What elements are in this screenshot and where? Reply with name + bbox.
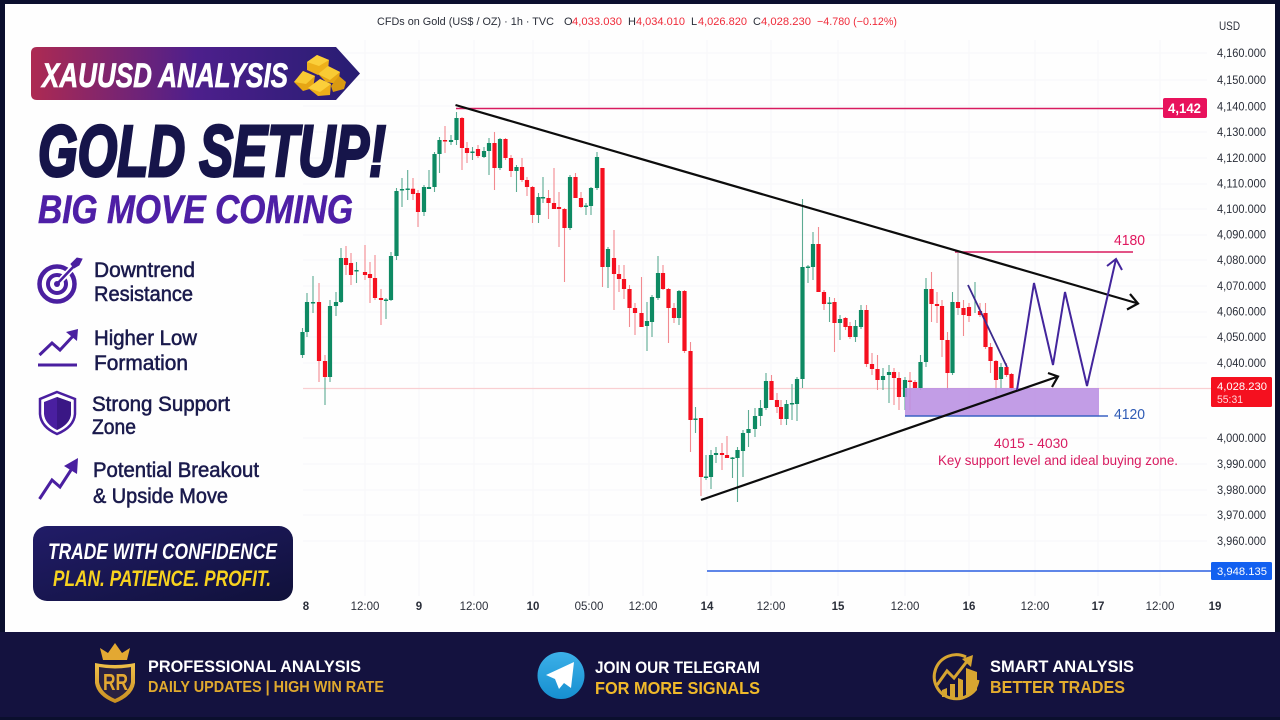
badge: XAUUSD ANALYSIS	[31, 47, 360, 100]
short falling trendline	[968, 285, 1007, 367]
level line: 4120	[905, 415, 1108, 417]
chart header: symbol and OHLC values: −4.780 (−0.12%)	[817, 16, 897, 28]
icon: breakout arrow	[40, 458, 78, 499]
title: GOLD SETUP!: GOLD SETUP!	[38, 112, 386, 192]
time axis: 12:00	[1021, 601, 1049, 613]
green candle wicks	[302, 112, 1001, 502]
chart header: symbol and OHLC values: L	[691, 16, 697, 28]
icon: shield	[40, 392, 75, 434]
icon: gold bars	[294, 55, 346, 96]
level line: 3,948.135	[707, 570, 1211, 572]
price axis: 4,040.000	[1217, 358, 1266, 370]
footer: professional analysis: PROFESSIONAL ANALYSIS	[148, 657, 361, 676]
time axis: 10	[527, 601, 539, 613]
footer: smart analysis: SMART ANALYSIS	[990, 657, 1134, 676]
time axis: 12:00	[460, 601, 488, 613]
level line: 4180 target	[955, 251, 1133, 253]
footer: telegram: JOIN OUR TELEGRAM	[595, 658, 760, 677]
price axis: 4,000.000	[1217, 433, 1266, 445]
label: 4180: 4180	[1114, 232, 1145, 249]
price axis: 3,990.000	[1217, 459, 1266, 471]
chart header: symbol and OHLC values: O	[564, 16, 573, 28]
list item: downtrend resistance: Resistance	[94, 282, 193, 306]
price axis: 3,960.000	[1217, 536, 1266, 548]
footer bar	[0, 632, 1280, 717]
price axis: 4,150.000	[1217, 75, 1266, 87]
list item: higher low formation	[38, 326, 197, 375]
price axis: 4,130.000	[1217, 127, 1266, 139]
red candle bodies	[319, 118, 1012, 477]
time axis: 15	[832, 601, 845, 613]
price axis: 4,110.000	[1217, 178, 1266, 190]
list item: potential breakout	[40, 458, 259, 508]
callout: trade with confidence: TRADE WITH CONFIDENCE	[48, 539, 278, 564]
footer: telegram	[538, 652, 760, 699]
chart header: symbol and OHLC values: 4,034.010	[636, 16, 685, 28]
price axis: 3,980.000	[1217, 485, 1266, 497]
time axis: 12:00	[1146, 601, 1174, 613]
price axis	[1217, 21, 1266, 548]
footer: telegram: FOR MORE SIGNALS	[595, 678, 760, 698]
grey tall wick at the 4180 high	[957, 253, 959, 315]
footer: smart analysis: BETTER TRADES	[990, 677, 1125, 697]
time axis	[303, 601, 1221, 613]
time axis: 9	[416, 601, 422, 613]
chart header: symbol and OHLC values: CFDs on Gold (US$ / OZ) · 1h · TVC	[377, 16, 554, 28]
candlesticks	[302, 112, 1012, 502]
green candle bodies	[302, 118, 1001, 478]
icon: trend line	[38, 329, 78, 365]
chart header: symbol and OHLC values: 4,028.230	[761, 16, 811, 28]
badge: XAUUSD ANALYSIS: XAUUSD ANALYSIS	[40, 57, 288, 95]
icon: gold chart circle	[934, 655, 978, 699]
time axis: 12:00	[629, 601, 657, 613]
price axis: 4,050.000	[1217, 332, 1266, 344]
price tag: 4,142	[1163, 98, 1207, 118]
price tag: current price and countdown: 55:31	[1217, 394, 1243, 406]
time axis: 16	[963, 601, 975, 613]
price tag: 4,142: 4,142	[1168, 100, 1201, 116]
icon: telegram	[538, 652, 584, 699]
icon: target	[40, 258, 82, 302]
time axis: 19	[1209, 601, 1221, 613]
list item: strong support zone	[40, 392, 230, 439]
chart header: symbol and OHLC values: H	[628, 16, 636, 28]
list item: potential breakout: Potential Breakout	[93, 458, 259, 482]
time axis: 05:00	[575, 601, 603, 613]
price axis: 4,140.000	[1217, 102, 1266, 114]
price tag: current price and countdown	[1211, 377, 1272, 407]
footer: smart analysis	[934, 655, 1134, 699]
price tag: 3,948.135	[1211, 562, 1272, 580]
support zone rectangle	[905, 388, 1099, 416]
level line: 4142 resistance	[456, 108, 1163, 110]
price axis: 4,070.000	[1217, 281, 1266, 293]
list item: potential breakout: & Upside Move	[93, 484, 228, 508]
price axis: 4,160.000	[1217, 48, 1266, 60]
time axis: 12:00	[757, 601, 785, 613]
label: 4120: 4120	[1114, 406, 1145, 423]
annotation: key support level: Key support level and ideal buying zone.	[938, 453, 1178, 468]
list item: higher low formation: Higher Low	[94, 326, 197, 350]
chart header: symbol and OHLC values: 4,033.030	[572, 16, 622, 28]
price axis: 4,100.000	[1217, 204, 1266, 216]
list item: higher low formation: Formation	[94, 351, 188, 375]
price axis: USD	[1219, 21, 1240, 33]
list item: downtrend resistance: Downtrend	[94, 258, 195, 282]
price tag: current price and countdown: 4,028.230	[1217, 381, 1267, 393]
current price line	[303, 388, 1211, 390]
time axis: 17	[1092, 601, 1104, 613]
icon: RR shield logo	[95, 643, 135, 703]
projected zigzag path with arrow	[1017, 259, 1122, 390]
time axis: 12:00	[891, 601, 919, 613]
footer: professional analysis	[95, 643, 384, 703]
red candle wicks	[319, 117, 1012, 496]
chart header: symbol and OHLC values: 4,026.820	[698, 16, 747, 28]
annotation: 4015 - 4030: 4015 - 4030	[994, 435, 1068, 451]
callout: trade with confidence: PLAN. PATIENCE. PROFIT.	[53, 566, 271, 591]
list item: downtrend resistance	[40, 258, 195, 306]
price tag: 3,948.135: 3,948.135	[1217, 566, 1267, 578]
time axis: 14	[701, 601, 714, 613]
time axis: 8	[303, 601, 310, 613]
chart header: symbol and OHLC values	[377, 16, 897, 28]
list item: strong support zone: Zone	[92, 415, 136, 439]
list item: strong support zone: Strong Support	[92, 392, 230, 416]
price axis: 4,090.000	[1217, 230, 1266, 242]
chart grid	[303, 40, 1207, 596]
time axis: 12:00	[351, 601, 379, 613]
downtrend resistance line with arrow	[456, 105, 1138, 310]
price axis: 4,060.000	[1217, 306, 1266, 318]
icon: RR shield logo: RR	[103, 669, 128, 695]
price axis: 4,080.000	[1217, 255, 1266, 267]
chart header: symbol and OHLC values: C	[753, 16, 761, 28]
price axis: 3,970.000	[1217, 510, 1266, 522]
uptrend support line with arrow	[701, 373, 1058, 500]
callout: trade with confidence	[33, 526, 293, 601]
footer: professional analysis: DAILY UPDATES | HIGH WIN RATE	[148, 679, 384, 696]
price axis: 4,120.000	[1217, 153, 1266, 165]
subtitle: BIG MOVE COMING: BIG MOVE COMING	[38, 188, 353, 232]
